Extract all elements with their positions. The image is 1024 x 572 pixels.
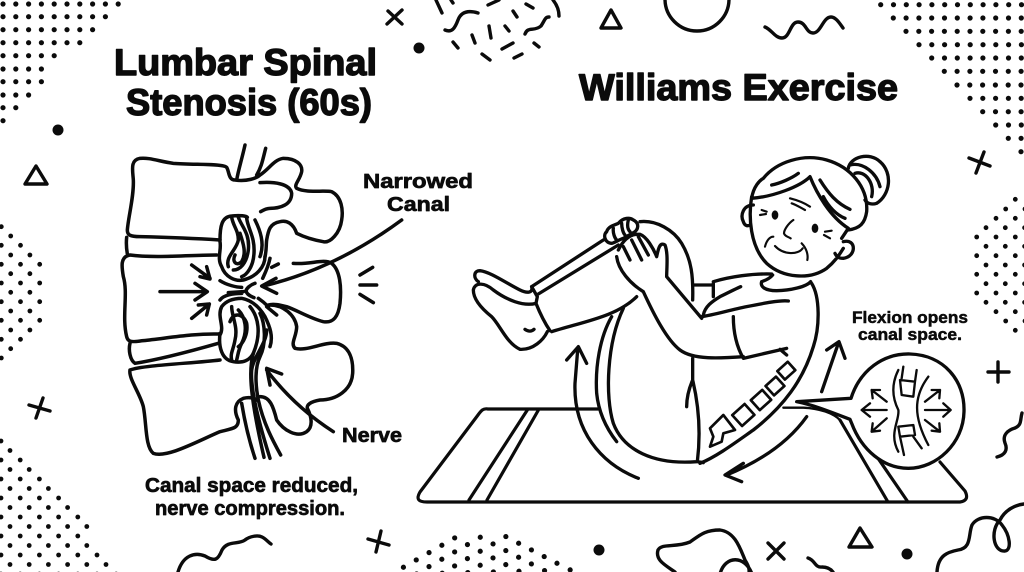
lower disc bulge (220, 298, 271, 362)
head and face (742, 158, 867, 276)
halftone dots: top left (3, 4, 119, 121)
title: lumbar spinal stenosis (114, 42, 377, 123)
middle vertebra (122, 237, 341, 363)
upper vertebra (127, 145, 342, 257)
motion arrows (725, 342, 845, 482)
illustration: woman doing knee to chest stretch (473, 156, 964, 482)
halftone dots: bottom left (1, 441, 135, 572)
caption: flexion opens canal space: Flexion opens (852, 309, 968, 327)
label: narrowed canal: Narrowed (363, 171, 473, 193)
lower vertebra (130, 360, 257, 454)
caption: canal space reduced: nerve compression. (155, 498, 345, 520)
shin and thigh (532, 221, 693, 332)
feet and socks (473, 271, 550, 349)
decorative doodles: top scatter (436, 0, 559, 60)
halftone dots: top right (881, 5, 1024, 152)
decorative shapes: right side (969, 152, 1022, 457)
title: lumbar spinal stenosis: Stenosis (60s) (126, 82, 372, 123)
vertebrae inside back (710, 362, 795, 447)
caption: flexion opens canal space: canal space. (858, 326, 962, 344)
caption: canal space reduced (145, 475, 358, 520)
decorative shapes: bottom (178, 504, 1024, 572)
illustration: exercise mat (418, 409, 967, 502)
caption: flexion opens canal space (852, 309, 968, 344)
caption: canal space reduced: Canal space reduced, (145, 475, 358, 497)
label: narrowed canal (363, 171, 473, 216)
title: lumbar spinal stenosis: Lumbar Spinal (114, 42, 377, 83)
halftone dots: right blob (977, 199, 1024, 330)
callout: opened canal magnifier (783, 354, 964, 468)
clasped hands (605, 218, 743, 358)
title: williams exercise: Williams Exercise (579, 67, 898, 108)
hair bun (772, 156, 888, 218)
torso and hips (596, 308, 703, 463)
compressed nerve (242, 307, 281, 458)
radiating marks (360, 267, 377, 303)
decorative shapes: top (387, 0, 843, 54)
halftone dots: bottom centre (403, 535, 572, 572)
narrowing marks (220, 258, 278, 307)
shirt and back (693, 274, 818, 463)
narrowed canal pointer (263, 220, 402, 286)
lower facet joint (260, 305, 353, 434)
motion arrow: hip (567, 347, 638, 478)
diagram: lumbar spine with stenosis (122, 145, 402, 458)
facial features (760, 198, 832, 260)
decorative shapes: left side (25, 124, 64, 418)
nerve pointer (267, 368, 333, 432)
label: narrowed canal: Canal (387, 194, 450, 216)
halftone dots: left blob (1, 227, 40, 358)
compression arrows (160, 265, 277, 318)
upper disc bulge (219, 216, 265, 280)
label: nerve: Nerve (342, 425, 402, 447)
